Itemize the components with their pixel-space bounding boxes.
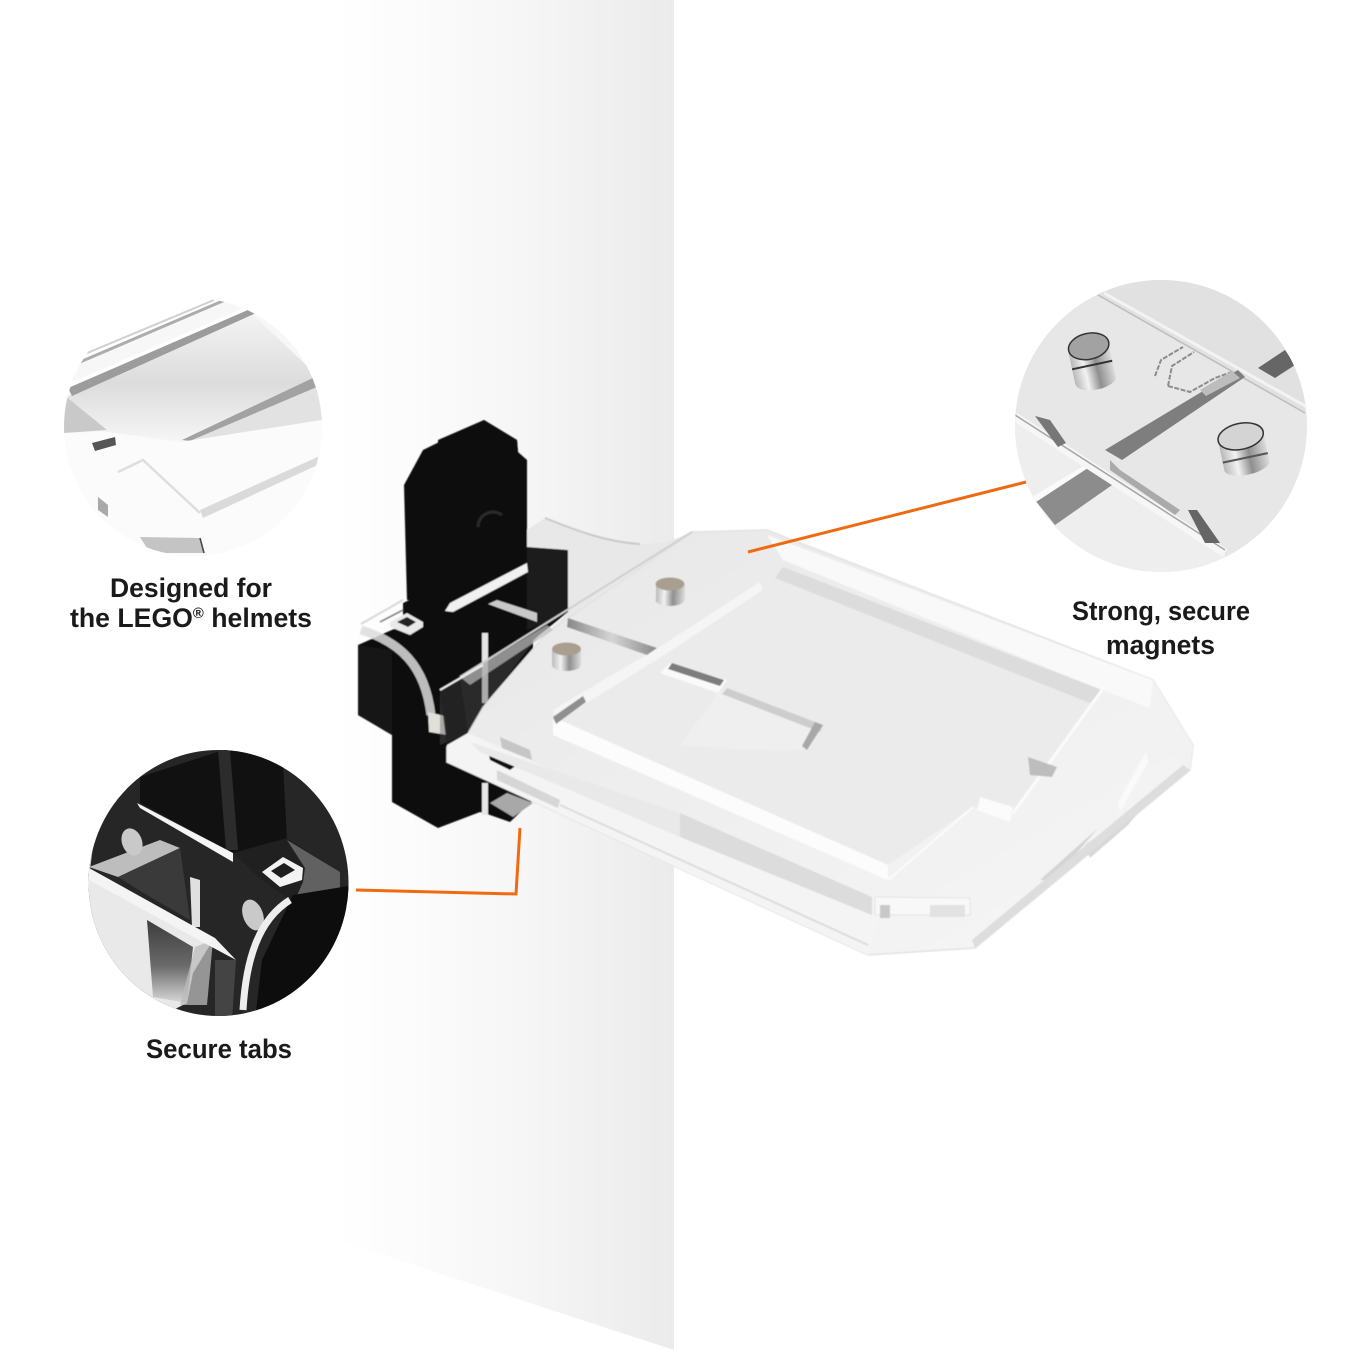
clear bracket with tab (361, 563, 537, 735)
caption: strong magnets (1072, 596, 1250, 660)
background wall gradient (0, 0, 674, 1350)
right magnet in detail (1217, 422, 1270, 476)
recessed tray surface (553, 567, 1102, 865)
grey rear strip of tray (775, 567, 1102, 703)
plate bottom edge lines (560, 805, 868, 945)
back plate with curved edge (527, 518, 700, 633)
caption: secure tabs: Secure tabs (146, 1034, 292, 1064)
small edge smudge (553, 696, 586, 724)
main clear plate (440, 530, 1193, 955)
right corner details (875, 680, 1193, 948)
caption: designed for LEGO helmets: Designed for (110, 573, 272, 603)
caption: strong magnets: magnets (1106, 630, 1215, 660)
product: acrylic stand with black mount (358, 420, 1193, 955)
upper raised rail (767, 535, 1153, 708)
black helmet mount (358, 420, 568, 828)
detail circle: magnets (1000, 280, 1307, 575)
front raised white rail (553, 717, 888, 880)
magnet: lower (552, 642, 581, 671)
long curved tab (680, 688, 823, 751)
magnet: upper (656, 578, 685, 606)
left magnet in detail (1068, 332, 1116, 390)
callout line: secure tabs (356, 828, 520, 894)
caption: strong magnets: Strong, secure (1072, 596, 1250, 626)
callout line: magnets (748, 482, 1026, 552)
caption: designed for LEGO helmets: ® (193, 605, 204, 622)
left tray rail edge (553, 582, 763, 722)
lower front strip (680, 813, 872, 915)
caption: designed for LEGO helmets (70, 573, 312, 633)
metal slot strip (567, 618, 657, 655)
detail circle: helmet fit (64, 298, 322, 556)
slot block (660, 663, 727, 693)
detail circle: secure tabs (85, 745, 355, 1020)
caption: designed for LEGO helmets: helmets (204, 603, 312, 633)
caption: designed for LEGO helmets: the LEGO (70, 603, 195, 633)
